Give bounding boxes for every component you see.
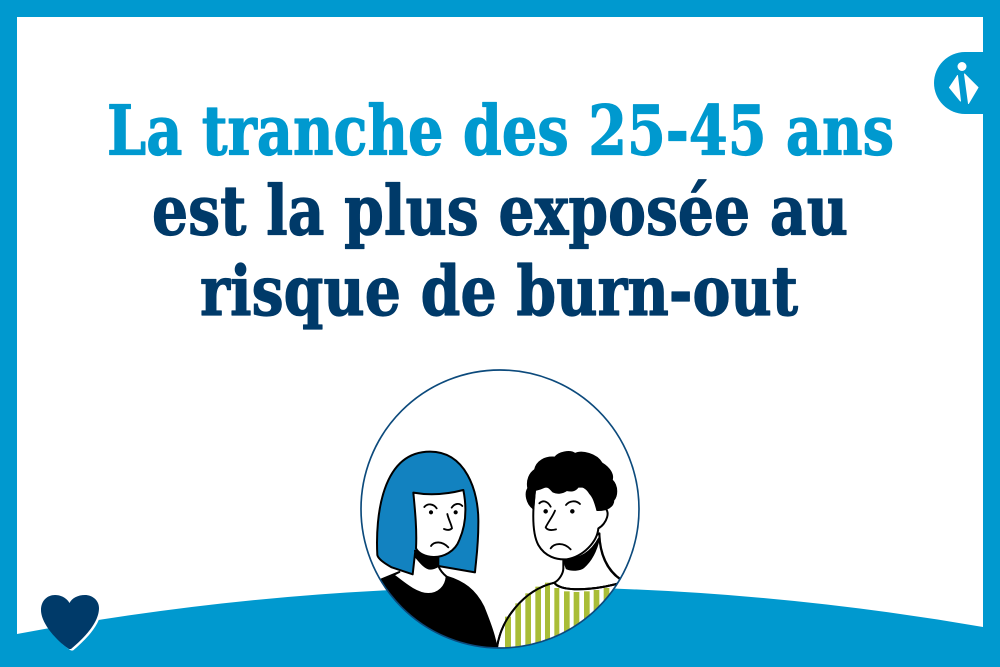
man's curly hair [527, 452, 616, 510]
bottom blue hump [17, 587, 983, 667]
woman's neck line [438, 566, 447, 577]
title line 2: est la plus exposée au [152, 172, 848, 252]
man's neck right line [599, 533, 619, 579]
woman's hair [377, 452, 478, 574]
woman's black top [380, 572, 497, 650]
woman's neck shadow [415, 551, 438, 569]
woman's face [413, 490, 465, 557]
woman's facial features [424, 504, 462, 547]
title [107, 92, 894, 332]
circle background [361, 370, 639, 648]
circle outline [361, 370, 639, 648]
man's neck [554, 533, 622, 589]
man's facial features [539, 501, 580, 549]
man's face [533, 487, 608, 559]
icon: heart [41, 595, 101, 650]
title line 3: risque de burn-out [200, 252, 798, 332]
man's striped shirt [497, 580, 622, 650]
illustration: two worried people in a circle [361, 370, 639, 650]
icon: logo tab [934, 52, 983, 114]
man's neck shadow [563, 538, 599, 570]
